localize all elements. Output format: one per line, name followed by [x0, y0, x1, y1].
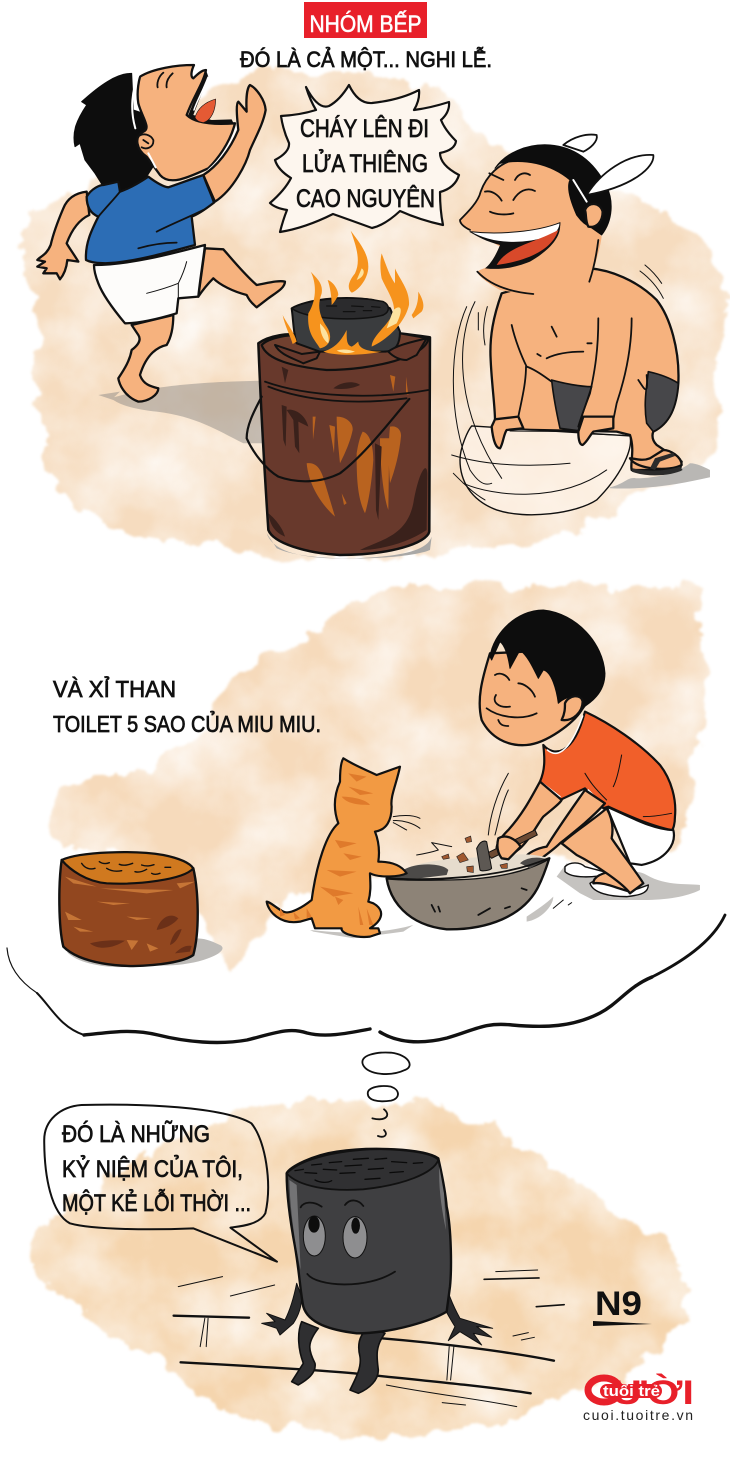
speech bubble — [44, 1105, 277, 1262]
bucket top — [262, 333, 428, 370]
logo: Cười Tuổi Trẻ: tuổi trẻ — [603, 1383, 660, 1400]
head — [460, 159, 602, 293]
shadow — [67, 938, 223, 967]
bucket rim bands — [265, 382, 428, 402]
ground shadows — [310, 863, 700, 938]
boy hair — [490, 610, 605, 708]
speech text: MỘT KẺ LỖI THỜI ... — [62, 1188, 251, 1217]
heading line: ĐÓ LÀ CẢ MỘT... NGHI LỄ. — [240, 46, 492, 72]
panel: crushing coal for the cat — [7, 582, 725, 1042]
legs — [292, 1322, 385, 1393]
winnowing tray — [460, 426, 630, 515]
standing leg — [118, 315, 173, 402]
thought bubbles — [362, 1052, 410, 1137]
open mouth — [470, 223, 560, 269]
character: dancing woman in blue shirt — [37, 65, 285, 402]
raised leg — [198, 248, 285, 307]
eye and ear lines — [137, 73, 173, 148]
blue shirt — [86, 175, 214, 263]
character: boy with hammer, cat and basin — [267, 610, 700, 938]
white shorts — [607, 807, 674, 865]
speech bubble: fire chant — [270, 85, 459, 232]
rust streaks — [307, 375, 408, 517]
heading tag: Nhóm bếp — [304, 2, 427, 38]
cylinder body — [287, 1149, 451, 1333]
boy arms — [497, 782, 605, 863]
motion lines — [417, 773, 572, 908]
top holes — [82, 862, 171, 874]
coal chunks — [442, 836, 507, 873]
collar and fold lines — [542, 716, 603, 805]
body — [490, 268, 682, 470]
coal briquette, brown — [59, 852, 223, 967]
bubble text lines: CHÁY LÊN ĐI — [300, 114, 429, 143]
white headband — [132, 74, 156, 167]
thought cloud border — [7, 915, 725, 1042]
face — [137, 65, 235, 180]
bucket shadow — [267, 533, 432, 559]
watercolor background wash — [30, 1101, 690, 1440]
boy hand on hammer — [497, 837, 521, 859]
darker patches — [90, 916, 192, 953]
ear — [585, 204, 603, 227]
sandal and foot — [630, 450, 683, 475]
caption text — [53, 674, 321, 737]
boy head — [480, 650, 593, 745]
boy shirt — [540, 712, 675, 830]
briquette on stove — [292, 298, 400, 352]
watercolor background wash — [25, 73, 723, 560]
logo: Cười Tuổi Trẻ: ƯỜI — [612, 1374, 694, 1412]
top holes — [295, 1158, 423, 1182]
sheen on sides — [289, 1167, 446, 1270]
dark shorts — [552, 372, 678, 432]
signature N9 — [593, 1285, 652, 1326]
boy face lines — [487, 674, 537, 726]
logo: Cười Tuổi Trẻ: cuoi.tuoitre.vn — [583, 1407, 693, 1423]
soot streaks — [268, 367, 427, 550]
face lines — [485, 173, 535, 214]
basin — [387, 854, 549, 929]
shirt folds — [98, 192, 203, 248]
arms — [262, 1272, 493, 1345]
cylinder top — [287, 1149, 438, 1190]
character: laughing man winnowing — [452, 135, 710, 515]
speech text: ĐÓ LÀ NHỮNG — [62, 1120, 210, 1148]
cat stripes — [280, 773, 373, 925]
ground shadow — [610, 463, 710, 489]
speech text — [62, 1120, 251, 1217]
bubble text lines: LỬA THIÊNG — [302, 148, 428, 178]
panel: ritual of lighting the stove — [25, 2, 723, 560]
stove: rusty bucket with briquette and flames — [247, 231, 432, 559]
brows and smile — [301, 1200, 395, 1284]
speech text: KỶ NIỆM CỦA TÔI, — [62, 1154, 243, 1183]
bubble text lines — [296, 114, 435, 213]
caption text: TOILET 5 SAO CỦA MIU MIU. — [53, 709, 321, 737]
hammer — [477, 830, 537, 871]
white shorts — [94, 245, 205, 323]
flames — [283, 231, 423, 355]
orange cat — [267, 758, 420, 937]
cat whiskers — [393, 816, 420, 830]
support chocks — [275, 338, 427, 363]
panel: the lonely briquette speaks — [30, 1052, 694, 1440]
floor shadow under woman — [98, 381, 270, 443]
bucket body — [258, 333, 430, 555]
boy ear — [562, 696, 583, 720]
logo: Cười Tuổi Trẻ — [583, 1374, 694, 1423]
hands on tray — [492, 417, 613, 448]
feathers — [563, 135, 653, 202]
character: black briquette sitting — [262, 1149, 493, 1393]
lighter streaks — [65, 877, 195, 952]
boy thigh and leg — [562, 808, 643, 893]
mouth and tongue — [188, 70, 237, 170]
caption text: VÀ XỈ THAN — [53, 674, 176, 702]
shorts fold — [147, 262, 187, 298]
hair — [74, 73, 162, 192]
motion lines by shoulder and elbow — [478, 265, 663, 345]
eyes — [303, 1216, 367, 1258]
watercolor background wash — [45, 582, 705, 972]
slippers — [565, 863, 648, 897]
tray weave lines — [452, 302, 623, 500]
raised arm and hand — [203, 85, 266, 202]
body lines — [512, 318, 647, 427]
signature N9: N9 — [595, 1285, 642, 1323]
left arm and hand — [37, 192, 89, 279]
body — [59, 860, 198, 966]
head outline — [460, 160, 598, 294]
shirt fold — [585, 755, 672, 817]
bubble text lines: CAO NGUYÊN — [296, 184, 435, 213]
top face — [62, 852, 193, 884]
bench and motion lines — [174, 1270, 564, 1407]
hair — [495, 145, 611, 235]
bucket handle — [247, 397, 409, 481]
heading tag: Nhóm bếp: NHÓM BẾP — [310, 10, 422, 38]
